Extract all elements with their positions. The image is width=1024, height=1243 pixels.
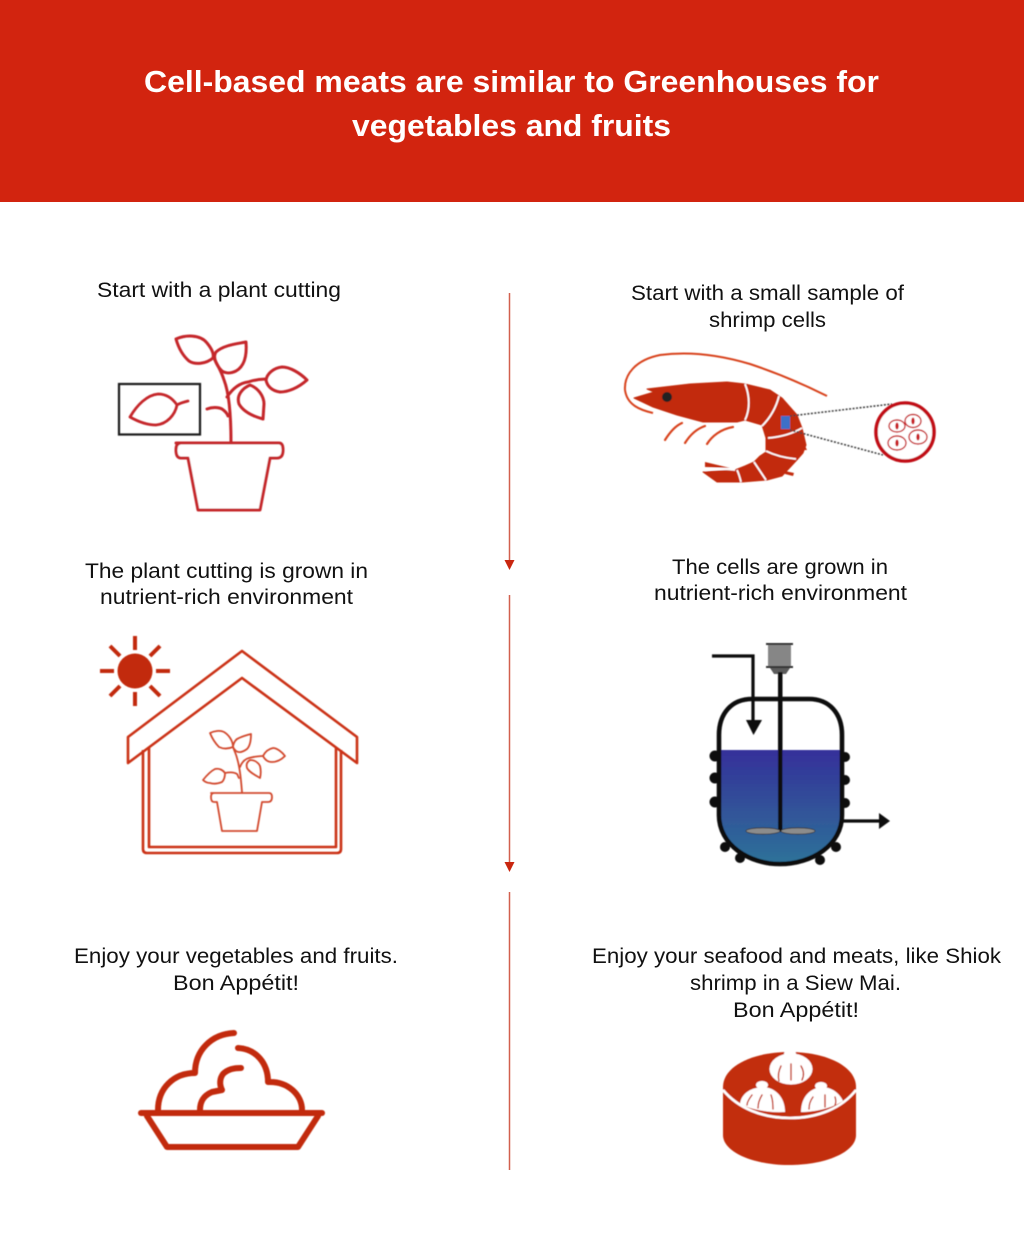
divider line: final step	[508, 892, 510, 1170]
dumplings	[740, 1050, 843, 1112]
text: enjoy seafood: Enjoy your seafood and meats, like Shiok	[592, 944, 1001, 968]
text: plant cutting is grown	[85, 559, 368, 609]
text: enjoy vegetables: Enjoy your vegetables and fruits.	[74, 944, 398, 968]
legs	[665, 423, 733, 444]
text: cells are grown: nutrient-rich environment	[654, 581, 907, 605]
liquid	[720, 750, 841, 863]
icon: greenhouse	[128, 651, 357, 853]
inlet arrow	[712, 656, 753, 724]
text: start with shrimp cells	[631, 281, 904, 332]
steamer rim highlight	[723, 1090, 856, 1118]
text: cells are grown	[654, 555, 907, 605]
text: enjoy seafood: shrimp in a Siew Mai.	[690, 971, 901, 995]
icon: plant in greenhouse	[203, 731, 285, 831]
icon: siew mai steamer	[723, 1050, 856, 1165]
arrow: step 2 to step 3	[504, 595, 514, 872]
text: enjoy vegetables	[74, 944, 398, 995]
text: plant cutting is grown: nutrient-rich environment	[100, 585, 353, 609]
jacket bumps	[710, 750, 850, 865]
text: start with shrimp cells: Start with a small sample of	[631, 281, 904, 305]
dotted zoom lines	[790, 404, 892, 455]
icon: potted plant with cutting	[176, 336, 307, 510]
icon: sun	[100, 636, 170, 706]
cell circle	[876, 403, 934, 461]
shrimp body	[634, 382, 806, 482]
eye	[662, 392, 672, 402]
title: Cell-based meats are similar to Greenhouses for	[144, 64, 879, 99]
icon: bioreactor	[710, 644, 890, 865]
icon: shrimp with cell sample	[625, 353, 934, 482]
icon: bowl of food	[141, 1033, 322, 1147]
text: enjoy seafood: Bon Appétit!	[733, 998, 859, 1022]
segment separators	[705, 384, 802, 482]
text: enjoy seafood	[592, 944, 1001, 1022]
text: cells are grown: The cells are grown in	[672, 555, 888, 579]
title	[144, 64, 879, 143]
arrow: step 1 to step 2	[504, 293, 514, 570]
text: plant cutting is grown: The plant cutting is grown in	[85, 559, 368, 583]
icon: cutting in black frame	[119, 384, 200, 434]
outlet arrow	[843, 819, 882, 823]
sample marker	[781, 416, 790, 429]
title: vegetables and fruits	[352, 108, 671, 143]
vessel wall	[719, 699, 842, 864]
motor	[768, 644, 791, 668]
shaft and impeller	[778, 672, 782, 832]
text: start with shrimp cells: shrimp cells	[709, 308, 826, 332]
text: enjoy vegetables: Bon Appétit!	[173, 971, 299, 995]
header banner	[0, 0, 1024, 202]
antenna	[625, 353, 827, 413]
text: start with a plant cutting: Start with a plant cutting	[97, 278, 341, 302]
